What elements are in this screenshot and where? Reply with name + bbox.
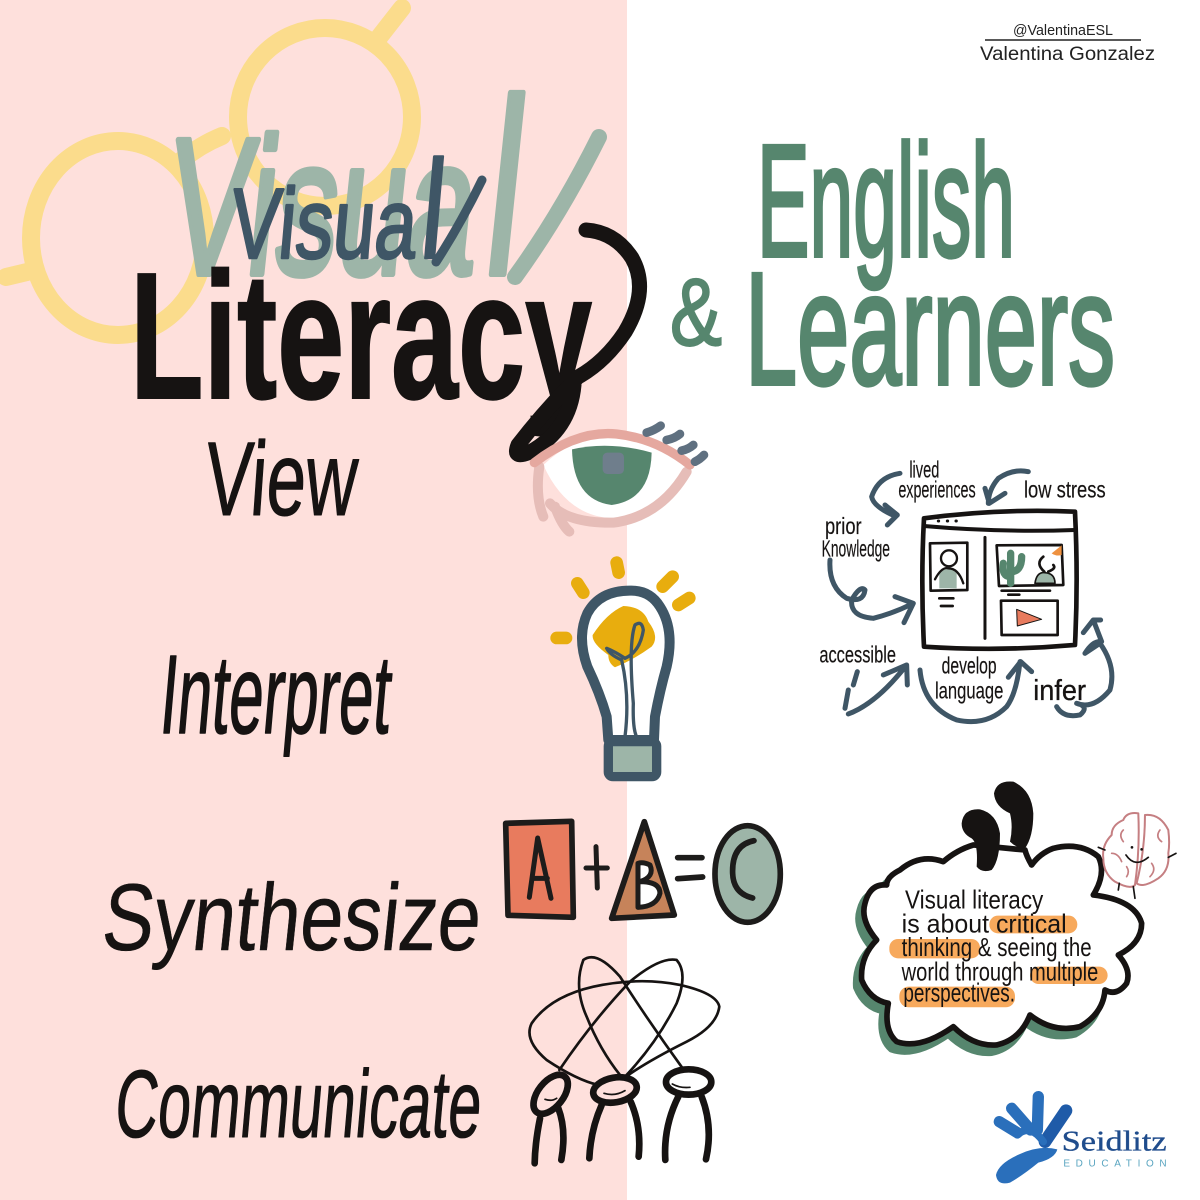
browser window [922, 511, 1077, 649]
quote marks [962, 781, 1033, 871]
icon: A plus B equals C [506, 821, 780, 922]
heading: ampersand: & [670, 259, 722, 366]
credit: author handle: Valentina Gonzalez [980, 44, 1155, 65]
quote text: is about critical [902, 909, 1067, 939]
logo: Seidlitz Education [996, 1097, 1167, 1183]
diagram labels: accessible [819, 642, 896, 668]
quote text: thinking & seeing the [902, 932, 1092, 962]
logo wordmark: Seidlitz [1062, 1126, 1167, 1158]
icon: yellow glasses [6, 8, 412, 335]
icon: three people with connected ideas [527, 957, 719, 1163]
diagram labels: low stress [1024, 476, 1106, 502]
diagram labels: prior [825, 513, 862, 539]
heading: Literacy [130, 230, 640, 455]
text highlights [889, 916, 1108, 1007]
icon: light bulb [557, 563, 689, 777]
logo tagline: EDUCATION [1063, 1159, 1167, 1170]
diagram labels: language [935, 677, 1003, 703]
diagram: browser window with learning supports [819, 456, 1112, 722]
label: Communicate: Communicate [111, 1051, 487, 1158]
credit: author handle [980, 22, 1155, 65]
diagram labels: develop [942, 652, 997, 678]
heading: small Visual: Visual [225, 133, 452, 288]
support arrows [830, 471, 1112, 722]
quote text: perspectives. [903, 978, 1015, 1008]
logo hand [996, 1097, 1066, 1183]
cloud outline [862, 845, 1142, 1045]
diagram labels [819, 456, 1106, 707]
label: Synthesize: Synthesize [98, 865, 487, 971]
label: View: View [201, 421, 362, 538]
diagram labels: Knowledge [822, 536, 890, 562]
heading: Literacy: Literacy [130, 236, 592, 437]
diagram labels: infer [1033, 675, 1086, 707]
label: Interpret: Interpret [156, 631, 397, 757]
diagram labels: experiences [898, 476, 976, 502]
quote text: Visual literacy [905, 884, 1043, 914]
diagram labels: lived [909, 456, 939, 482]
heading: large sage Visual: Visual [157, 48, 539, 328]
icon: eye [534, 426, 704, 532]
quote text: world through multiple [901, 957, 1098, 987]
panel: pink left background [0, 0, 627, 1200]
credit: author handle: @ValentinaESL [1013, 22, 1113, 39]
quote text [901, 884, 1098, 1008]
callout: cloud quote [857, 781, 1176, 1052]
cloud green shadow [857, 852, 1100, 1052]
icon: smiling brain [1098, 813, 1176, 898]
